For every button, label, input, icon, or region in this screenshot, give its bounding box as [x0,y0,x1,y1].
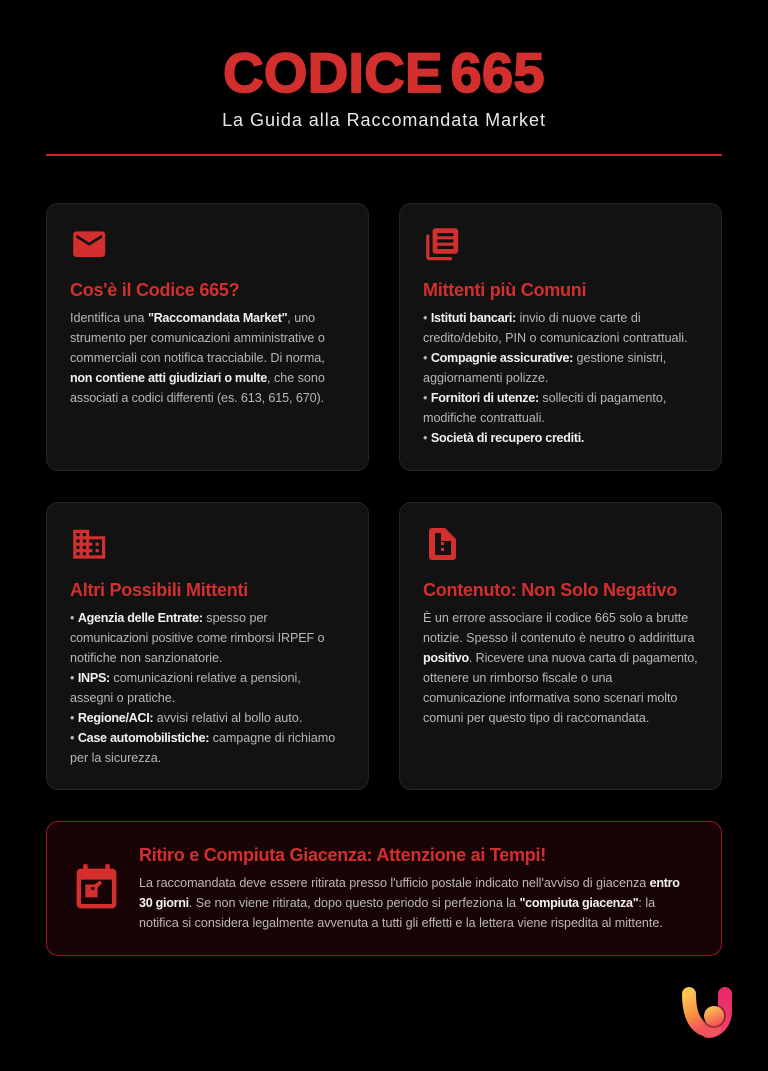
text block: assegni o pratiche. [70,691,175,705]
panel: Altri Possibili Mittenti [46,502,369,790]
title: CODICE 665 [223,41,545,104]
icon: logo [682,987,732,1038]
heading: Altri Possibili Mittenti [70,580,248,600]
heading: Ritiro e Compiuta Giacenza: Attenzione ai Tempi! [139,845,546,865]
text block [70,611,335,765]
text block: • Istituti bancari: invio di nuove carte di [423,311,641,325]
icon: buildings [73,530,106,559]
text block [423,311,688,445]
text block: • Case automobilistiche: campagne di richiamo [70,731,335,745]
text block: notifica si considera legalmente avvenuta a tutti gli effetti e la lettera viene rispedita al mittente. [139,916,663,930]
subtitle: La Guida alla Raccomandata Market [222,110,546,130]
text block: associati a codici differenti (es. 613, 615, 670). [70,391,324,405]
text block: notifiche non sanzionatorie. [70,651,222,665]
text block: ottenere un rimborso fiscale o una [423,671,612,685]
text block: Identifica una "Raccomandata Market", uno [70,311,315,325]
text block: • Fornitori di utenze: solleciti di pagamento, [423,391,666,405]
text block: non contiene atti giudiziari o multe, che sono [70,371,325,385]
text block: aggiornamenti polizze. [423,371,548,385]
text block: • INPS: comunicazioni relative a pensioni, [70,671,301,685]
panel: Mittenti più Comuni [399,203,722,471]
text block: • Compagnie assicurative: gestione sinistri, [423,351,666,365]
heading: Cos'è il Codice 665? [70,280,239,300]
text block: È un errore associare il codice 665 solo a brutte [423,611,688,625]
text block: strumento per comunicazioni amministrative o [70,331,325,345]
text block: per la sicurezza. [70,751,161,765]
heading: Mittenti più Comuni [423,280,586,300]
text block: notizie. Spesso il contenuto è neutro o addirittura [423,631,695,645]
text block: modifiche contrattuali. [423,411,545,425]
panel: Ritiro e Compiuta Giacenza [46,821,722,956]
icon: stacked documents [426,228,458,260]
text block: • Agenzia delle Entrate: spesso per [70,611,268,625]
text block [423,610,698,725]
panel: Cos'è il Codice 665 [46,203,369,471]
icon: document with alert [429,528,456,560]
text block [139,876,680,930]
panel: Contenuto: Non Solo Negativo [399,502,722,790]
text block: • Regione/ACI: avvisi relativi al bollo auto. [70,711,302,725]
text block: 30 giorni. Se non viene ritirata, dopo questo periodo si perfeziona la "compiuta giacenza": la [139,896,655,910]
text block: positivo. Ricevere una nuova carta di pagamento, [423,651,698,665]
text block: comunicazioni positive come rimborsi IRPEF o [70,631,324,645]
text block: comunicazione informativa sono scenari molto [423,691,677,705]
icon: calendar [76,864,116,908]
text block: • Società di recupero crediti. [423,431,584,445]
text block: credito/debito, PIN o comunicazioni contrattuali. [423,331,688,345]
text block [70,311,325,405]
icon: envelope [73,231,106,257]
text block: commerciali con notifica tracciabile. Di norma, [70,351,325,365]
text block: La raccomandata deve essere ritirata presso l'ufficio postale indicato nell'avviso di giacenza entro [139,876,680,890]
heading: Contenuto: Non Solo Negativo [423,580,677,600]
text block: comuni per questo tipo di raccomandata. [423,711,649,725]
